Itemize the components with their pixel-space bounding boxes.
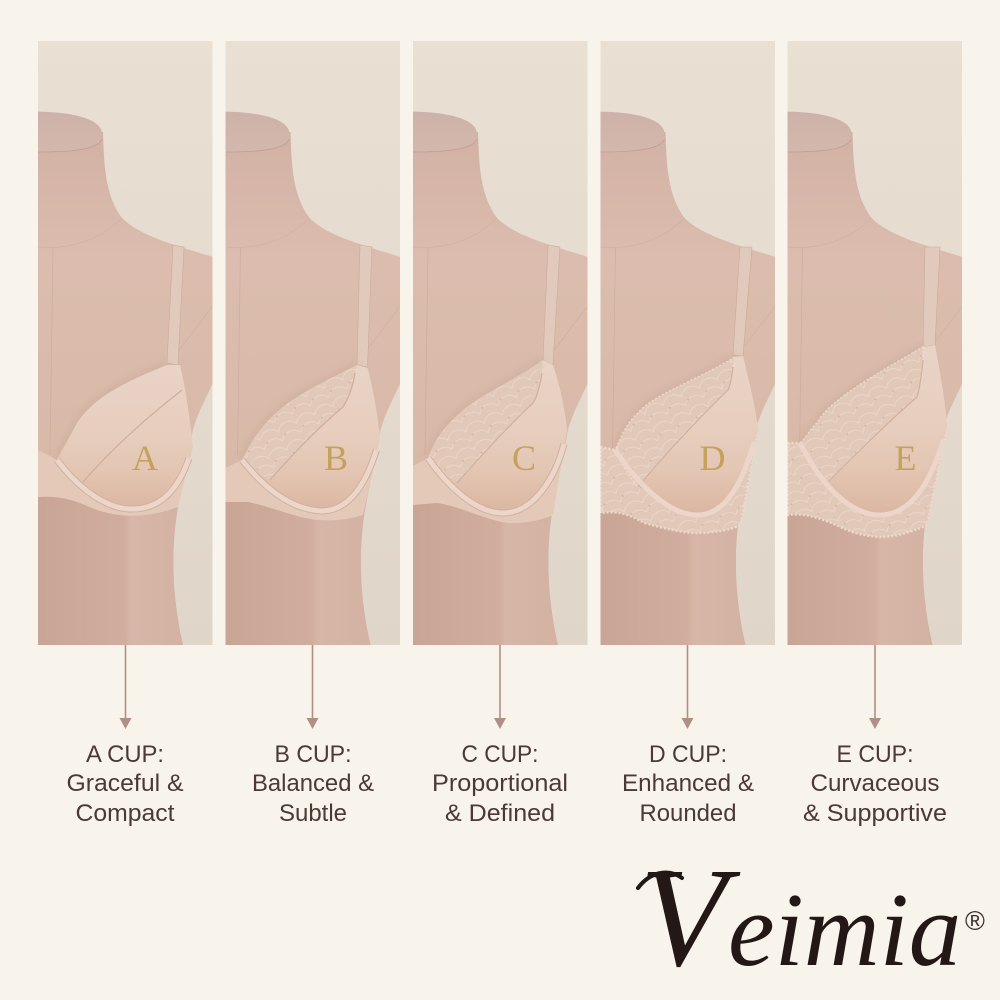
label: A cup: Graceful & — [66, 770, 184, 797]
label: A cup — [66, 741, 184, 827]
logo: Veimia: ® — [965, 906, 985, 936]
logo: Veimia: eimia — [728, 871, 961, 988]
panel: B cup — [208, 41, 400, 645]
panel: C cup — [395, 41, 588, 645]
bra: A cup — [38, 245, 193, 516]
label: B cup: Subtle — [279, 800, 347, 827]
cup letter B: B — [324, 438, 348, 478]
cup letter A: A — [132, 438, 158, 478]
cup letter D: D — [700, 438, 726, 478]
label: D cup — [622, 741, 754, 827]
label: E cup — [803, 741, 947, 827]
label: D cup: Enhanced & — [622, 770, 754, 797]
label: A cup: A CUP: — [86, 741, 164, 768]
logo: Veimia: V — [640, 838, 741, 996]
label: B cup: B CUP: — [274, 741, 352, 768]
cup letter E: E — [894, 438, 916, 478]
panel: E cup — [770, 41, 962, 645]
label: A cup: Compact — [76, 800, 175, 827]
label: E cup: E CUP: — [836, 741, 914, 768]
arrow: A — [120, 645, 132, 729]
arrow: E — [869, 645, 881, 729]
arrow: D — [682, 645, 694, 729]
label: E cup: & Supportive — [803, 800, 947, 827]
cup letter C: C — [512, 438, 536, 478]
logo: Veimia — [638, 838, 985, 996]
arrow: C — [494, 645, 506, 729]
label: C cup: Proportional — [432, 770, 568, 797]
bra: C cup — [413, 245, 567, 523]
label: C cup: & Defined — [445, 800, 555, 827]
label: D cup: Rounded — [640, 800, 736, 827]
panel: A cup — [20, 41, 213, 645]
arrow: B — [306, 645, 318, 729]
panel: D cup — [582, 41, 776, 645]
bra: E cup — [788, 247, 947, 537]
bra: B cup — [226, 245, 380, 520]
label: B cup — [252, 741, 374, 827]
label: D cup: D CUP: — [649, 741, 727, 768]
label: E cup: Curvaceous — [810, 770, 940, 797]
label: C cup: C CUP: — [462, 741, 538, 768]
label: B cup: Balanced & — [252, 770, 374, 797]
label: C cup — [432, 741, 568, 827]
bra: D cup — [600, 247, 758, 533]
